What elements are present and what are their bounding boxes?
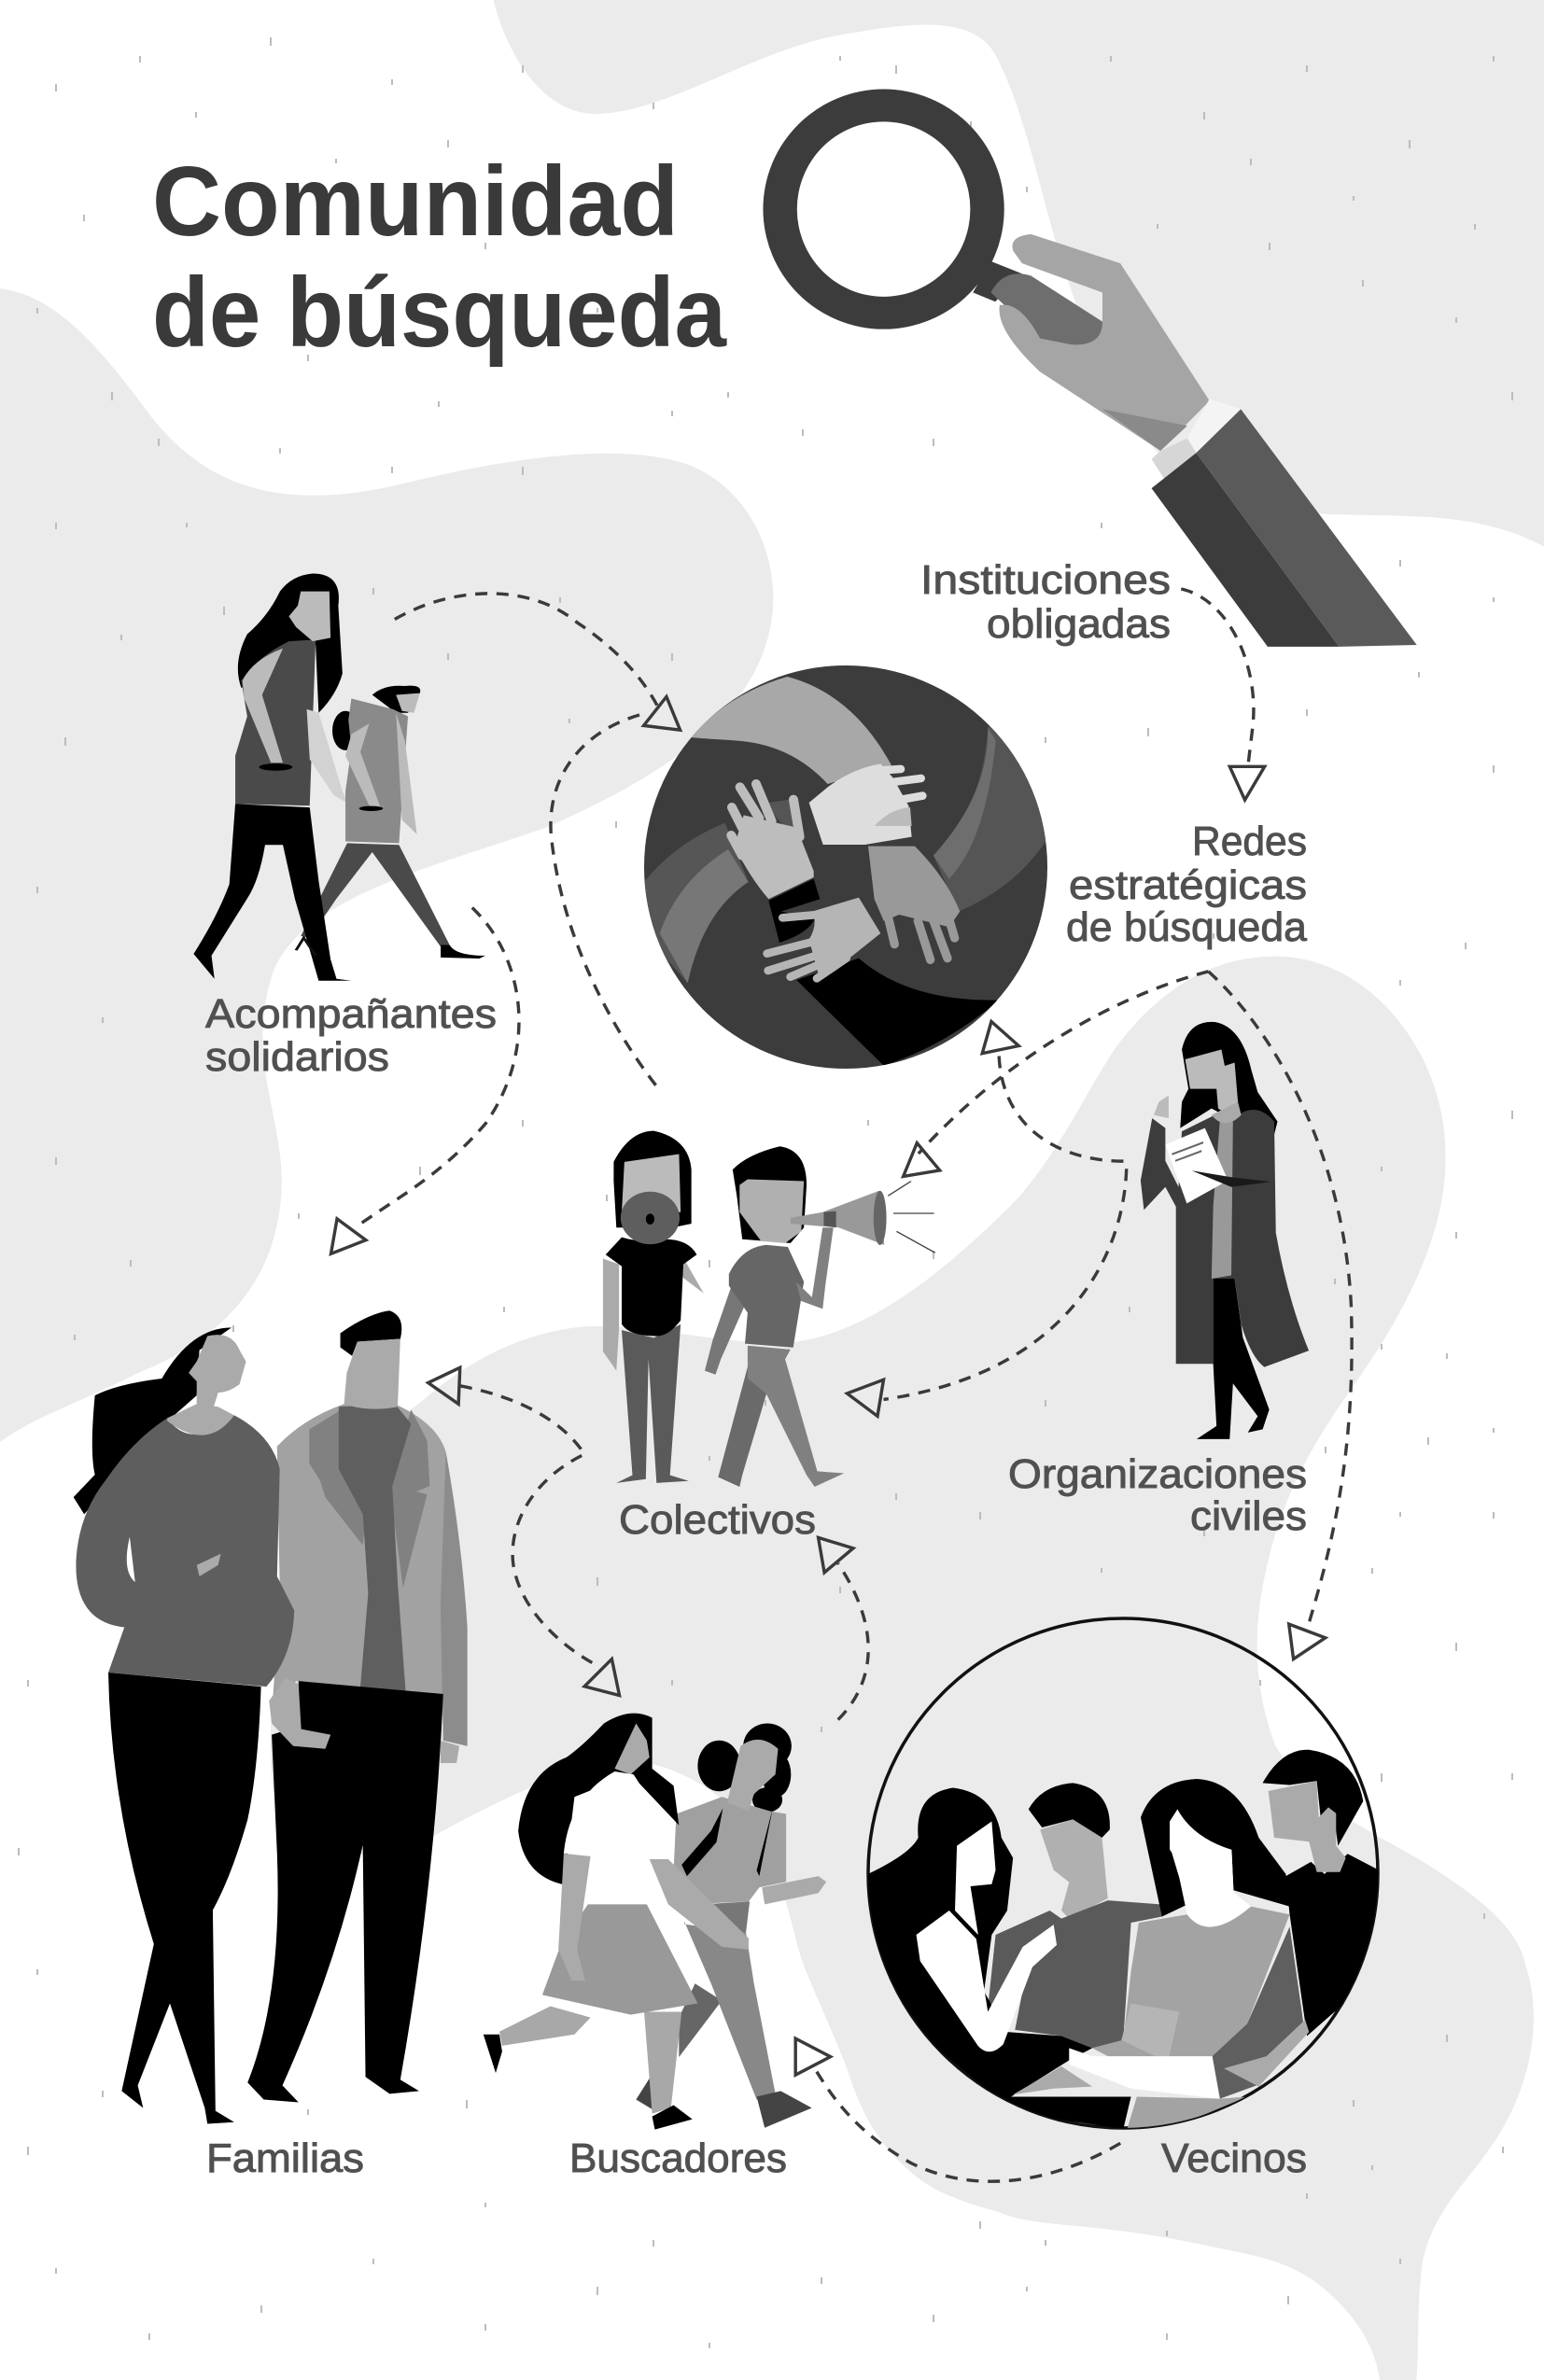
label: Instituciones obligadas: Instituciones	[920, 557, 1171, 603]
label: Redes estratégicas de búsqueda: estratégicas	[1069, 862, 1307, 908]
figure: buscadores two people walking	[484, 1714, 826, 2130]
label: Buscadores: Buscadores	[569, 2135, 787, 2181]
label: Colectivos: Colectivos	[619, 1497, 816, 1543]
label: Familias: Familias	[206, 2135, 364, 2181]
label: Organizaciones civiles: civiles	[1190, 1493, 1307, 1539]
label: Redes estratégicas de búsqueda: de búsqueda	[1066, 904, 1308, 950]
icon: hand holding magnifying glass	[763, 90, 1417, 647]
title	[152, 147, 727, 368]
label: Acompañantes solidarios	[205, 991, 497, 1080]
title: de búsqueda	[152, 258, 727, 368]
title: Comunidad	[152, 147, 679, 257]
label: Redes estratégicas de búsqueda	[1066, 819, 1308, 950]
label: Instituciones obligadas: obligadas	[987, 601, 1171, 647]
label: Organizaciones civiles	[1008, 1451, 1307, 1539]
figure: acompañantes solidarios	[193, 573, 485, 981]
dashed connection arrows	[331, 589, 1352, 2181]
label: Acompañantes solidarios: Acompañantes	[205, 991, 497, 1037]
label: Instituciones obligadas	[920, 557, 1171, 647]
label: Acompañantes solidarios: solidarios	[205, 1034, 389, 1080]
figure: colectivos with megaphones	[603, 1131, 935, 1487]
figure: vecinos group in circle	[868, 1618, 1379, 2129]
label: Redes estratégicas de búsqueda: Redes	[1192, 819, 1307, 864]
label: Vecinos: Vecinos	[1161, 2135, 1307, 2181]
label: Organizaciones civiles: Organizaciones	[1008, 1451, 1307, 1497]
figure: familias couple	[74, 1310, 468, 2124]
icon: circle with four interlocked hands	[643, 665, 1071, 1070]
figure: organizaciones civiles woman with document	[1141, 1022, 1309, 1439]
